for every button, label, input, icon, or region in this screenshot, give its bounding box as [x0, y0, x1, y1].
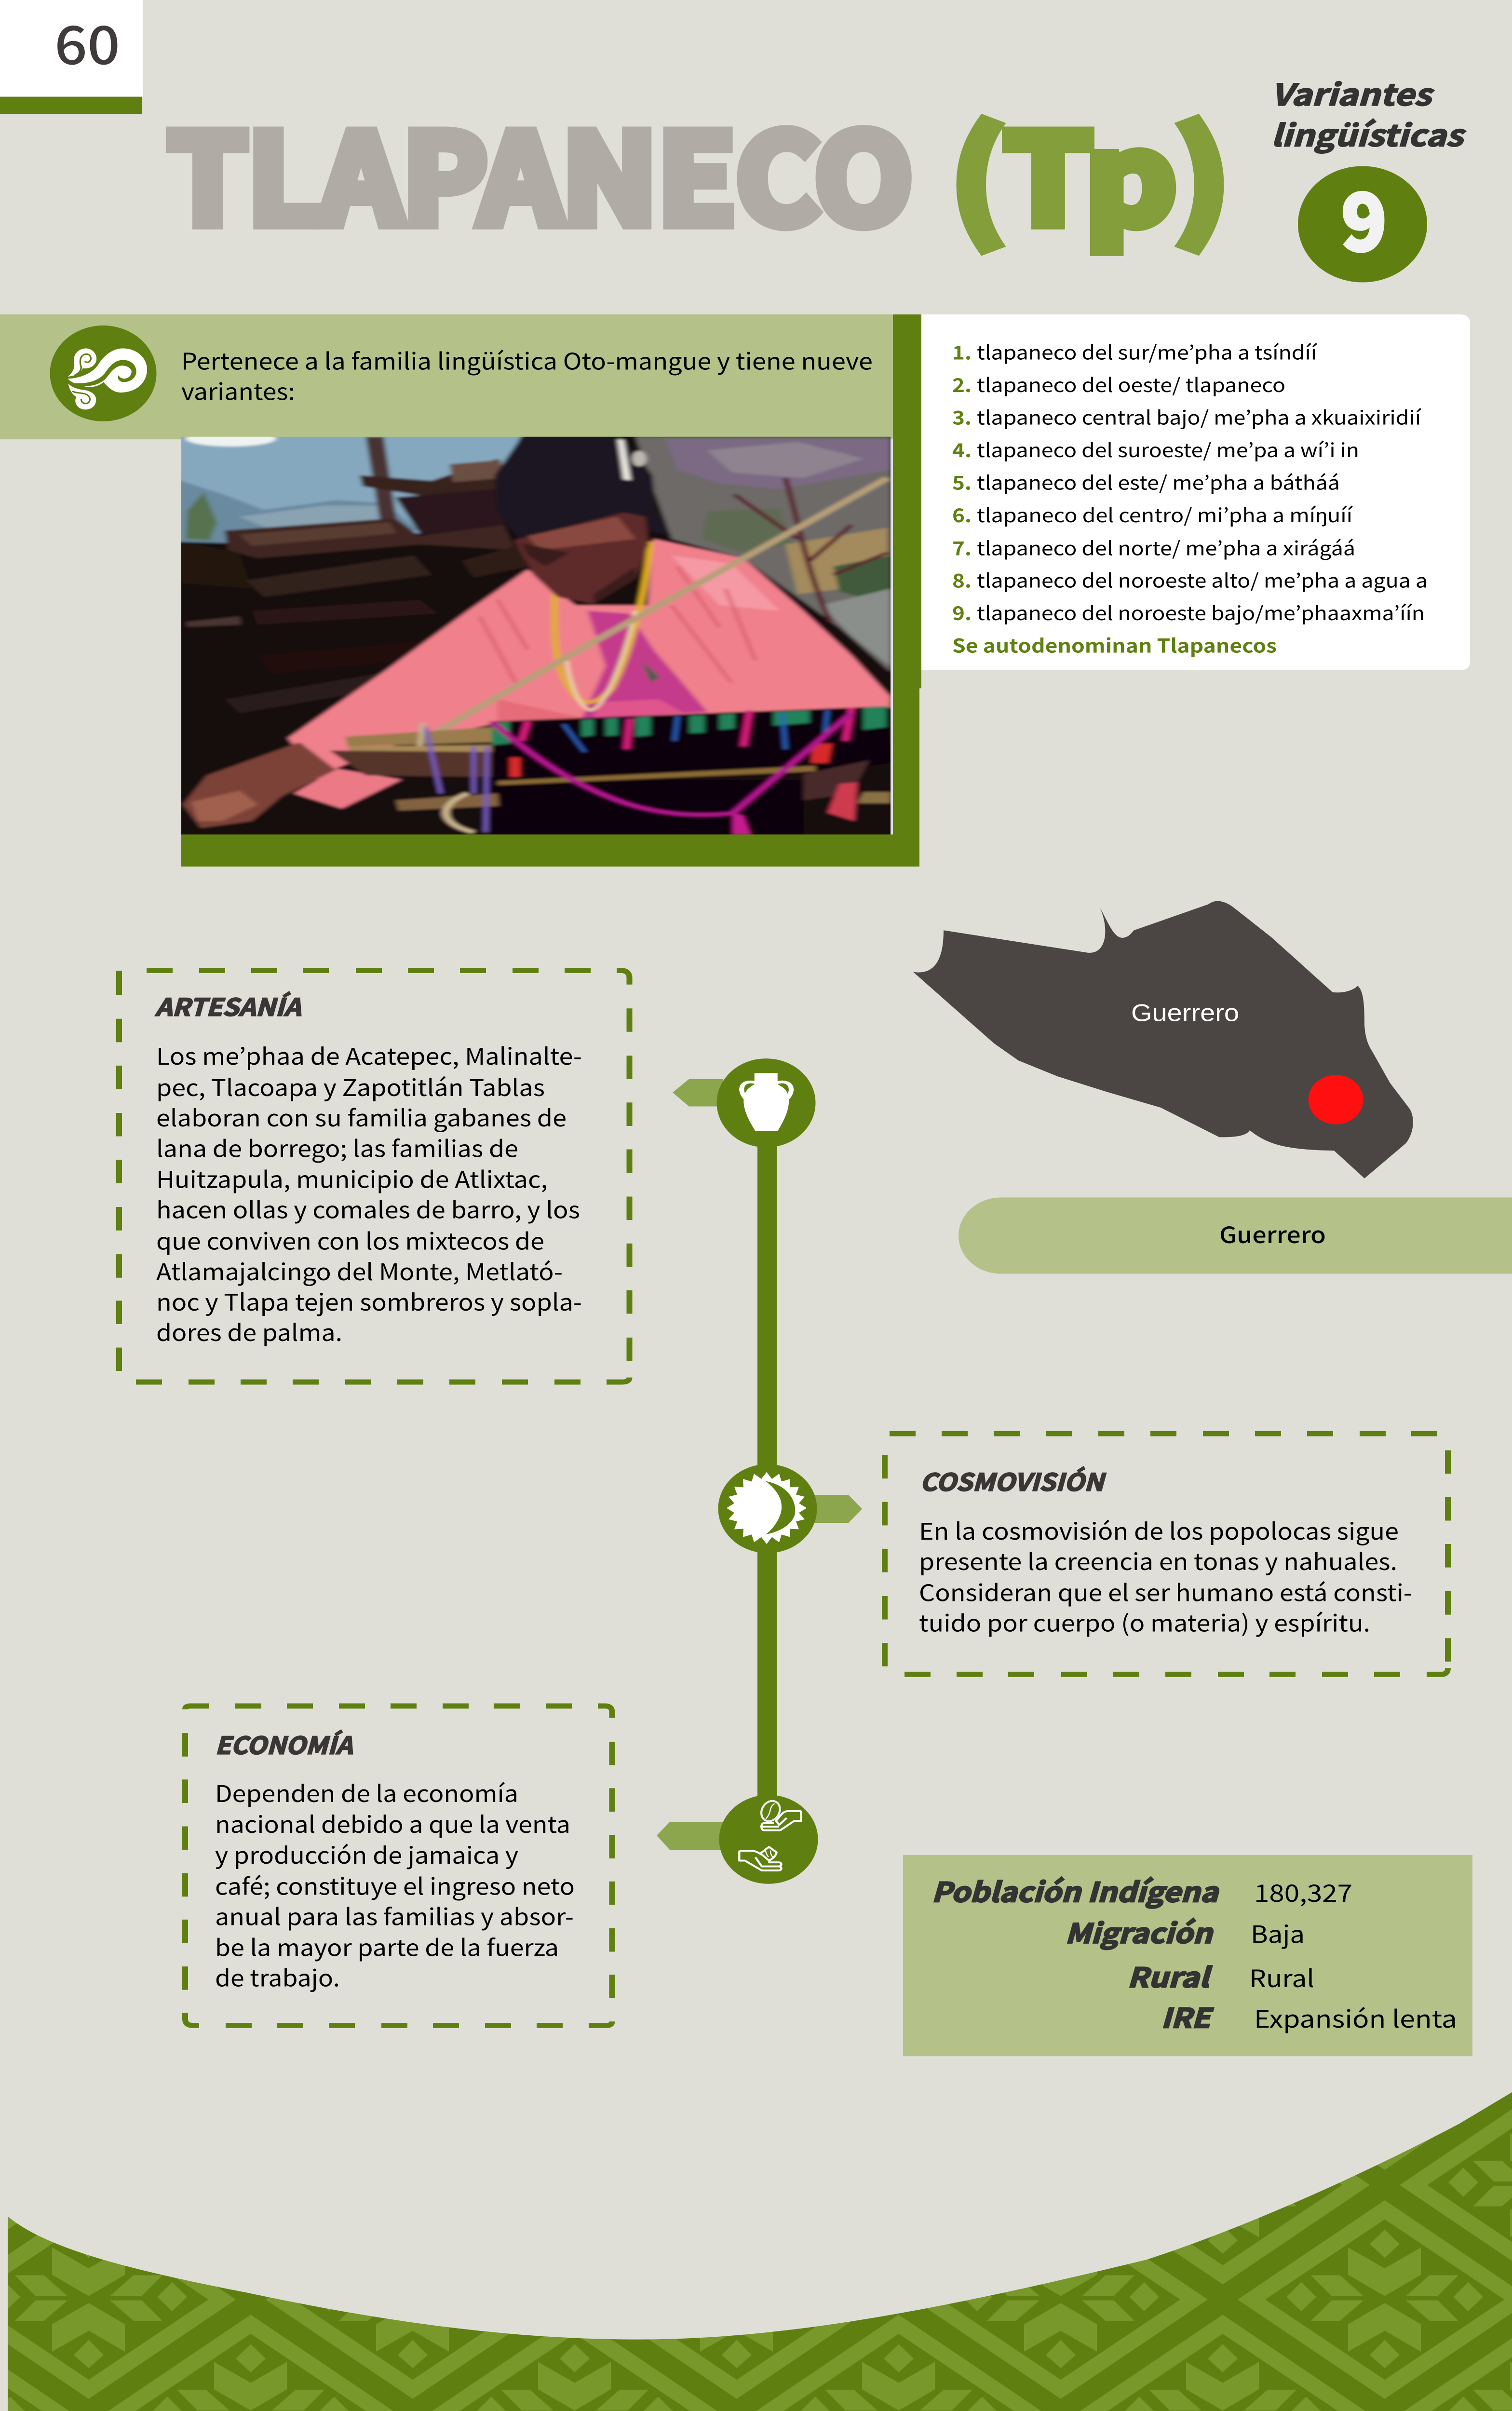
- icon: vase: [742, 1073, 791, 1131]
- heading: economía: ECONOMÍA: [215, 1727, 352, 1761]
- variant rows: 5.: [952, 468, 972, 496]
- statistics values: Rural: [1249, 1960, 1314, 1994]
- cosmovisión body text: En la cosmovisión de los popolocas sigue: [919, 1513, 1399, 1546]
- statistics labels: [932, 1871, 1219, 2035]
- variant rows: tlapaneco del sur/me’pha a tsíndíí: [977, 338, 1318, 366]
- arrow tag: [673, 1079, 723, 1106]
- statistics values: Expansión lenta: [1254, 2000, 1457, 2035]
- arrow tag: [810, 1495, 862, 1523]
- cosmovisión body text: tuido por cuerpo (o materia) y espíritu.: [919, 1605, 1370, 1639]
- variant rows: 6.: [952, 501, 972, 528]
- statistics labels: IRE: [1161, 1997, 1214, 2035]
- statistics values: [1249, 1874, 1457, 2035]
- variant rows: 2.: [952, 370, 972, 398]
- economía body text: [215, 1775, 575, 1993]
- map: Guerrero: [913, 901, 1413, 1178]
- economía body text: be la mayor parte de la fuerza: [215, 1930, 559, 1963]
- artesanía body text: hacen ollas y comales de barro, y los: [156, 1192, 580, 1225]
- node: economía: [657, 1795, 818, 1884]
- intro text: variantes:: [181, 373, 295, 406]
- icon: sun and moon: [727, 1472, 807, 1544]
- variant rows: 1.: [952, 338, 972, 366]
- panel: artesanía: [119, 971, 630, 1382]
- node: cosmovisión: [718, 1464, 862, 1553]
- artesanía body text: Atlamajalcingo del Monte, Metlató-: [156, 1254, 563, 1287]
- artesanía body text: Los me’phaa de Acatepec, Malinalte-: [156, 1038, 582, 1071]
- variant rows: tlapaneco del noroeste alto/ me’pha a agua a: [977, 566, 1428, 594]
- statistics values: Baja: [1251, 1916, 1305, 1950]
- map location marker: [1309, 1075, 1364, 1124]
- economía body text: y producción de jamaica y: [215, 1837, 518, 1870]
- icon: hands exchanging coffee: [739, 1799, 801, 1870]
- variant rows: tlapaneco del suroeste/ me’pa a wí’i in: [977, 435, 1359, 463]
- variant rows: 7.: [952, 533, 972, 561]
- map label: Guerrero: [1131, 1000, 1239, 1027]
- cosmovisión body text: [919, 1513, 1412, 1639]
- statistics labels: Población Indígena: [932, 1871, 1219, 1910]
- intro text: [181, 343, 873, 406]
- cosmovisión body text: Consideran que el ser humano está consti-: [919, 1575, 1412, 1608]
- variant rows: tlapaneco del norte/ me’pha a xirágáá: [977, 533, 1355, 561]
- economía body text: anual para las familias y absor-: [215, 1899, 574, 1932]
- variant rows: tlapaneco del este/ me’pha a bátháá: [977, 468, 1340, 496]
- panel: economía: [185, 1706, 612, 2025]
- heading: cosmovisión: COSMOVISIÓN: [920, 1463, 1107, 1498]
- artesanía body text: [156, 1038, 582, 1348]
- economía body text: Dependen de la economía: [215, 1775, 518, 1809]
- artesanía body text: lana de borrego; las familias de: [156, 1131, 518, 1164]
- economía body text: nacional debido a que la venta: [215, 1806, 570, 1840]
- variant rows: [952, 338, 1428, 626]
- variant rows: tlapaneco del centro/ mi’pha a míŋuíí: [977, 501, 1353, 528]
- variants counter: lingüísticas: [1271, 112, 1466, 155]
- state pill: Guerrero: [1219, 1218, 1326, 1250]
- artesanía body text: Huitzapula, municipio de Atlixtac,: [156, 1162, 548, 1195]
- artesanía body text: noc y Tlapa tejen sombreros y sopla-: [156, 1284, 582, 1317]
- variant rows: tlapaneco del oeste/ tlapaneco: [977, 370, 1285, 398]
- heading: artesanía: ARTESANÍA: [155, 989, 301, 1023]
- panel: statistics: [903, 1855, 1472, 2056]
- panel: variants list: [921, 314, 1470, 670]
- variant rows: 4.: [952, 435, 972, 463]
- state pill: [958, 1197, 1512, 1274]
- artesanía body text: dores de palma.: [156, 1314, 342, 1348]
- statistics values: 180,327: [1254, 1874, 1352, 1909]
- variant rows: tlapaneco central bajo/ me’pha a xkuaixiridií: [977, 403, 1422, 431]
- title: TLAPANECO: [168, 81, 913, 260]
- cosmovisión body text: presente la creencia en tonas y nahuales.: [919, 1544, 1397, 1577]
- green frame behind photo: [181, 314, 921, 867]
- arrow tag: [657, 1822, 723, 1850]
- intro band: [0, 314, 893, 439]
- timeline bar: [757, 1103, 777, 1840]
- page number tab: [0, 0, 143, 114]
- variant rows: 9.: [952, 598, 972, 626]
- economía body text: de trabajo.: [215, 1960, 340, 1993]
- self-designation: Se autodenominan Tlapanecos: [952, 631, 1277, 659]
- variants counter: [1271, 71, 1466, 283]
- statistics labels: Rural: [1127, 1956, 1213, 1995]
- artesanía body text: elaboran con su familia gabanes de: [156, 1100, 567, 1133]
- panel: cosmovisión: [885, 1434, 1448, 1674]
- statistics labels: Migración: [1065, 1912, 1214, 1951]
- variant rows: 3.: [952, 403, 972, 431]
- economía body text: café; constituye el ingreso neto: [215, 1869, 575, 1902]
- variants counter: 9: [1342, 161, 1386, 272]
- node: artesanía: [673, 1058, 816, 1147]
- variant rows: 8.: [952, 566, 972, 594]
- bottom textile pattern: [8, 2092, 1512, 2411]
- variants counter: Variantes: [1271, 71, 1434, 114]
- intro text: Pertenece a la familia lingüística Oto-mangue y tiene nueve: [181, 343, 873, 377]
- artesanía body text: pec, Tlacoapa y Zapotitlán Tablas: [156, 1070, 545, 1103]
- title: (Tp): [951, 81, 1229, 260]
- icon: swirl: [50, 325, 156, 421]
- photo: woman weaving on backstrap loom: [177, 431, 896, 836]
- page number tab: 60: [54, 3, 120, 80]
- variant rows: tlapaneco del noroeste bajo/me’phaaxma’íín: [977, 598, 1425, 626]
- artesanía body text: que conviven con los mixtecos de: [156, 1223, 544, 1256]
